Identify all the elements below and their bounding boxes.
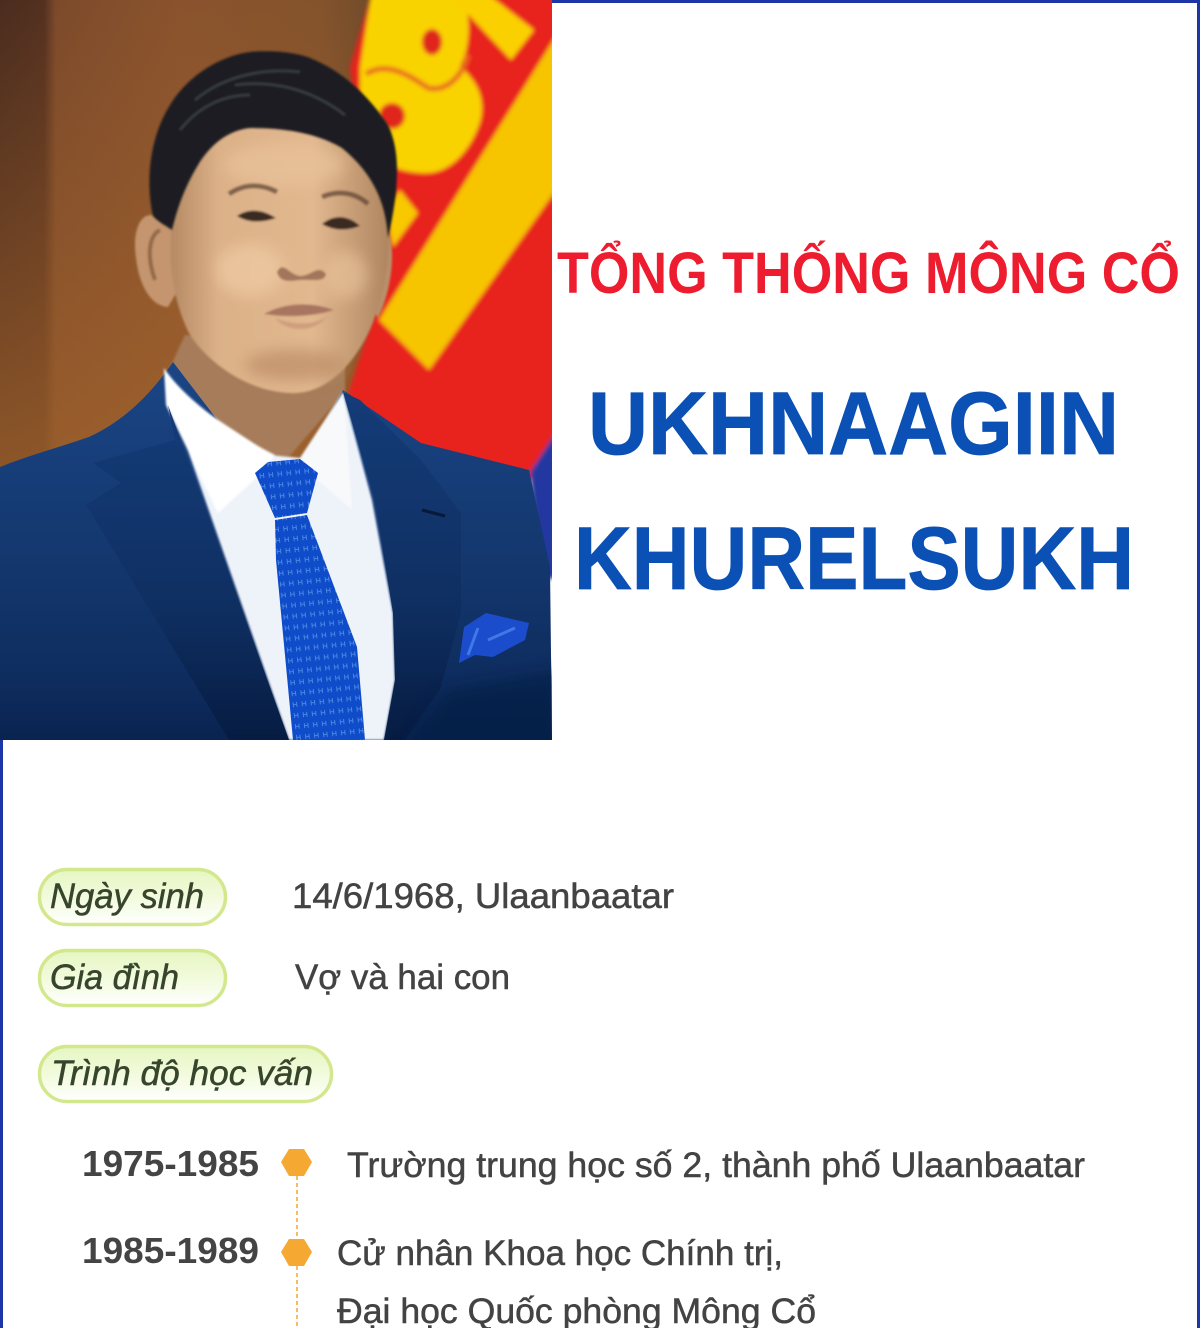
photo background wall — [0, 0, 400, 480]
pill: Trình độ học vấn: Trình độ học vấn — [51, 1054, 313, 1093]
timeline entry 1975-1985: 1975-1985 — [82, 1143, 259, 1184]
name line one: UKHNAAGIIN — [588, 373, 1119, 473]
lapels — [160, 392, 552, 740]
row: date of birth — [40, 870, 674, 924]
pill: Trình độ học vấn — [40, 1046, 332, 1102]
timeline entry 1985-1989 — [82, 1230, 816, 1328]
ear — [135, 215, 178, 307]
timeline entry 1985-1989: 1985-1989 — [82, 1230, 259, 1271]
pill: Gia đình — [40, 950, 226, 1006]
necktie — [255, 459, 365, 740]
face — [171, 105, 389, 393]
portrait photo: president in front of Mongolian flag — [0, 0, 560, 750]
education timeline — [82, 1143, 1085, 1328]
row: family — [40, 950, 510, 1006]
timeline entry 1985-1989: Cử nhân Khoa học Chính trị, — [337, 1234, 783, 1273]
value: birth date: 14/6/1968, Ulaanbaatar — [292, 877, 674, 916]
hair — [149, 51, 397, 238]
shirt and collar — [164, 368, 395, 740]
pocket square — [459, 613, 529, 663]
name line two: KHURELSUKH — [574, 508, 1134, 608]
head — [135, 105, 392, 393]
value: family: Vợ và hai con — [295, 958, 510, 997]
timeline entry 1975-1985 — [82, 1143, 1085, 1185]
pill: Gia đình: Gia đình — [50, 958, 179, 997]
suit jacket — [0, 362, 552, 740]
title — [557, 241, 1180, 608]
timeline entry 1975-1985: Trường trung học số 2, thành phố Ulaanbaatar — [347, 1146, 1085, 1185]
pill: Ngày sinh — [40, 870, 226, 924]
Mongolian flag — [340, 0, 556, 580]
timeline dashed connector — [296, 1176, 298, 1328]
pill: Ngày sinh: Ngày sinh — [50, 877, 204, 916]
neck — [168, 335, 345, 457]
